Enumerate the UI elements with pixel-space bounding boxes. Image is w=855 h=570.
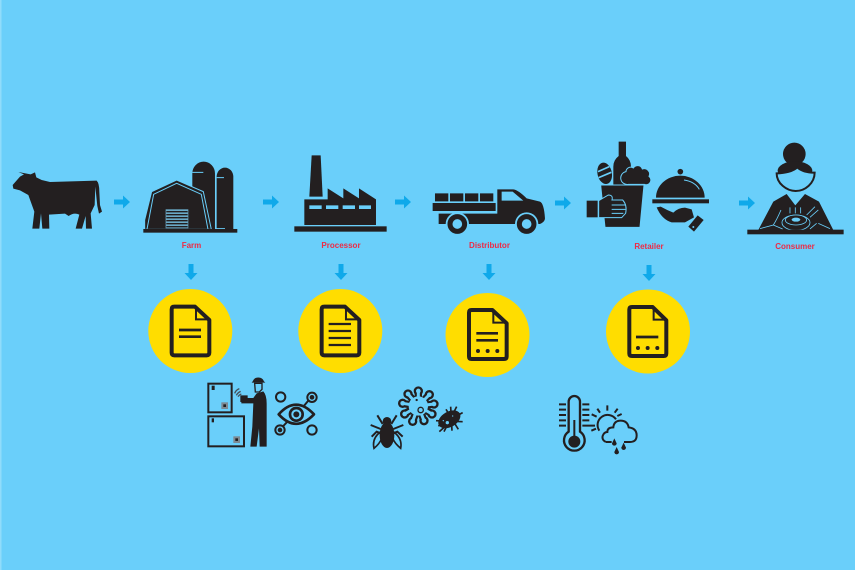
- arrow: processor down to document: [334, 264, 348, 280]
- document badge: distributor: [446, 293, 530, 377]
- arrow: distributor to retailer: [555, 196, 571, 210]
- document badge: farm: [148, 289, 232, 373]
- icon: connected eye: [275, 392, 317, 435]
- icon: worker scanning boxes: [208, 378, 267, 447]
- icon: retailer grocery bucket and hand: [587, 142, 651, 227]
- arrow: processor to distributor: [395, 196, 411, 208]
- label: Consumer: Consumer: [775, 242, 815, 251]
- icon: thermometer: [559, 396, 595, 451]
- icon: cow: [13, 172, 102, 229]
- icon: solid virus: [435, 407, 464, 432]
- icon: processor factory: [294, 155, 387, 232]
- icon: fly: [371, 415, 403, 448]
- icon: farm barn and silos: [143, 162, 237, 233]
- label: Farm: Farm: [182, 241, 201, 250]
- arrow: retailer to consumer: [739, 196, 755, 210]
- icon: retailer serving cloche on hand: [652, 169, 709, 232]
- icon: distributor truck: [433, 189, 545, 236]
- arrow: distributor down to document: [482, 264, 496, 280]
- label: Processor: Processor: [321, 241, 361, 250]
- document badge: retailer: [606, 290, 690, 374]
- icon: sun, cloud and rain: [591, 405, 637, 454]
- label: Distributor: Distributor: [469, 241, 510, 250]
- arrow: farm to processor: [263, 196, 279, 208]
- label: Retailer: Retailer: [634, 242, 664, 251]
- arrow: retailer down to document: [642, 265, 656, 281]
- icon: consumer eating at table: [747, 143, 844, 234]
- icon: outlined virus: [398, 386, 439, 426]
- arrow: cow to farm: [114, 196, 130, 208]
- arrow: farm down to document: [184, 264, 198, 280]
- document badge: processor: [298, 289, 382, 373]
